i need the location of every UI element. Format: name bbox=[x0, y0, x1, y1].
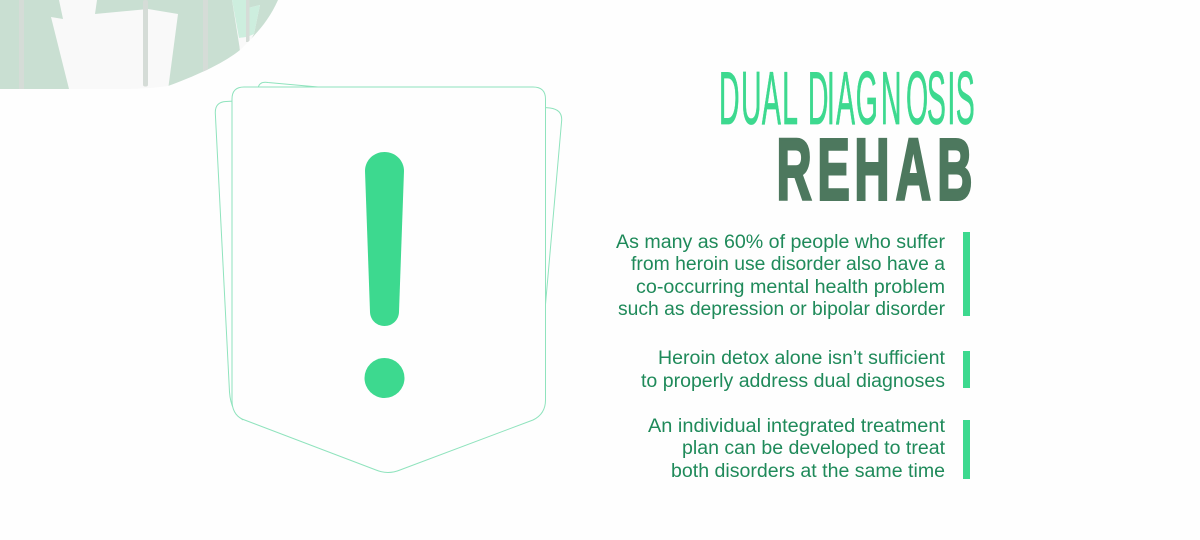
front shield card bbox=[232, 87, 546, 472]
text block: detox alone bbox=[641, 348, 946, 392]
back card rotated counter-clockwise bbox=[215, 101, 243, 420]
decorative forest scene bbox=[0, 0, 280, 90]
text block: integrated treatment: An individual integrated treatment bbox=[648, 416, 946, 437]
text block: integrated treatment: plan can be developed to treat bbox=[682, 438, 946, 459]
text block: integrated treatment: both disorders at the same time bbox=[671, 461, 945, 482]
text block: detox alone: Heroin detox alone isn’t sufficient bbox=[658, 348, 946, 369]
icon: exclamation mark bbox=[364, 152, 404, 398]
text block: 60 percent statistic: co-occurring mental health problem bbox=[636, 277, 945, 298]
heading: dual diagnosis: DUAL DIAGNOSIS bbox=[719, 58, 975, 141]
accent bar 2 bbox=[963, 351, 970, 388]
accent bar 1 bbox=[963, 232, 970, 316]
back card rotated clockwise bbox=[258, 82, 562, 310]
text block: 60 percent statistic: As many as 60% of people who suffer bbox=[616, 232, 946, 253]
text block: integrated treatment bbox=[648, 416, 946, 482]
text block: 60 percent statistic: from heroin use disorder also have a bbox=[631, 254, 945, 275]
heading: rehab: REHAB bbox=[776, 121, 972, 218]
title bbox=[719, 58, 975, 218]
alert badge bbox=[215, 82, 562, 473]
text block: 60 percent statistic bbox=[616, 232, 946, 320]
text block: 60 percent statistic: such as depression or bipolar disorder bbox=[618, 299, 946, 320]
text block: detox alone: to properly address dual diagnoses bbox=[641, 371, 945, 392]
accent bar 3 bbox=[963, 420, 970, 479]
